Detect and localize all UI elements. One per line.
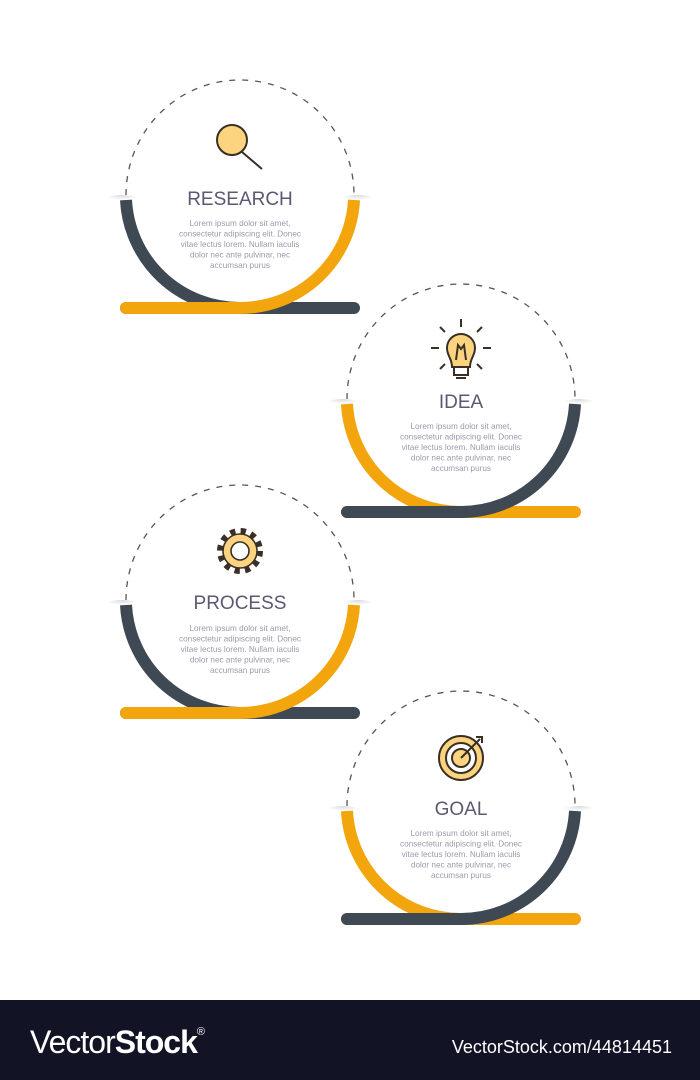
text: research body: vitae lectus lorem. Nullam iaculis bbox=[181, 240, 299, 249]
text: research body: Lorem ipsum dolor sit amet, bbox=[189, 219, 291, 228]
heading: goal: GOAL bbox=[435, 799, 487, 820]
panel: research bbox=[104, 80, 376, 308]
heading: idea: IDEA bbox=[439, 392, 483, 413]
text: research body: dolor nec ante pulvinar, nec bbox=[190, 250, 290, 260]
icon: target bbox=[439, 736, 483, 780]
text: process body: Lorem ipsum dolor sit amet, bbox=[189, 624, 291, 633]
text: idea body: Lorem ipsum dolor sit amet, bbox=[410, 422, 512, 431]
icon: gear bbox=[221, 532, 259, 570]
text: process body: vitae lectus lorem. Nullam iaculis bbox=[181, 645, 299, 654]
text: process body: accumsan purus bbox=[210, 666, 270, 675]
text: goal body: consectetur adipiscing elit. Donec bbox=[400, 840, 522, 848]
footer logo: VectorStock bbox=[30, 1024, 197, 1060]
text: process body: consectetur adipiscing elit. Donec bbox=[179, 634, 301, 644]
text: research body: consectetur adipiscing elit. Donec bbox=[179, 230, 301, 238]
footer url: VectorStock.com/44814451 bbox=[452, 1037, 672, 1057]
icon: magnifier bbox=[217, 125, 262, 169]
text: process body: dolor nec ante pulvinar, nec bbox=[190, 656, 290, 664]
text: idea body: dolor nec ante pulvinar, nec bbox=[411, 454, 511, 462]
panel: idea bbox=[325, 284, 597, 512]
text: idea body: vitae lectus lorem. Nullam iaculis bbox=[402, 443, 520, 452]
text: idea body: consectetur adipiscing elit. Donec bbox=[400, 432, 522, 442]
text: research body: accumsan purus bbox=[210, 261, 270, 270]
footer logo: ® bbox=[197, 1026, 205, 1038]
text: goal body: vitae lectus lorem. Nullam iaculis bbox=[402, 850, 520, 859]
text: goal body: dolor nec ante pulvinar, nec bbox=[411, 860, 511, 870]
text: goal body: accumsan purus bbox=[431, 871, 491, 880]
heading: process: PROCESS bbox=[194, 593, 286, 614]
panel: goal bbox=[325, 691, 597, 919]
text: goal body: Lorem ipsum dolor sit amet, bbox=[410, 829, 512, 838]
text: idea body: accumsan purus bbox=[431, 464, 491, 473]
icon: light bulb bbox=[431, 319, 491, 378]
heading: research: RESEARCH bbox=[187, 189, 293, 210]
panel: process bbox=[104, 485, 376, 713]
footer band bbox=[0, 1000, 700, 1080]
